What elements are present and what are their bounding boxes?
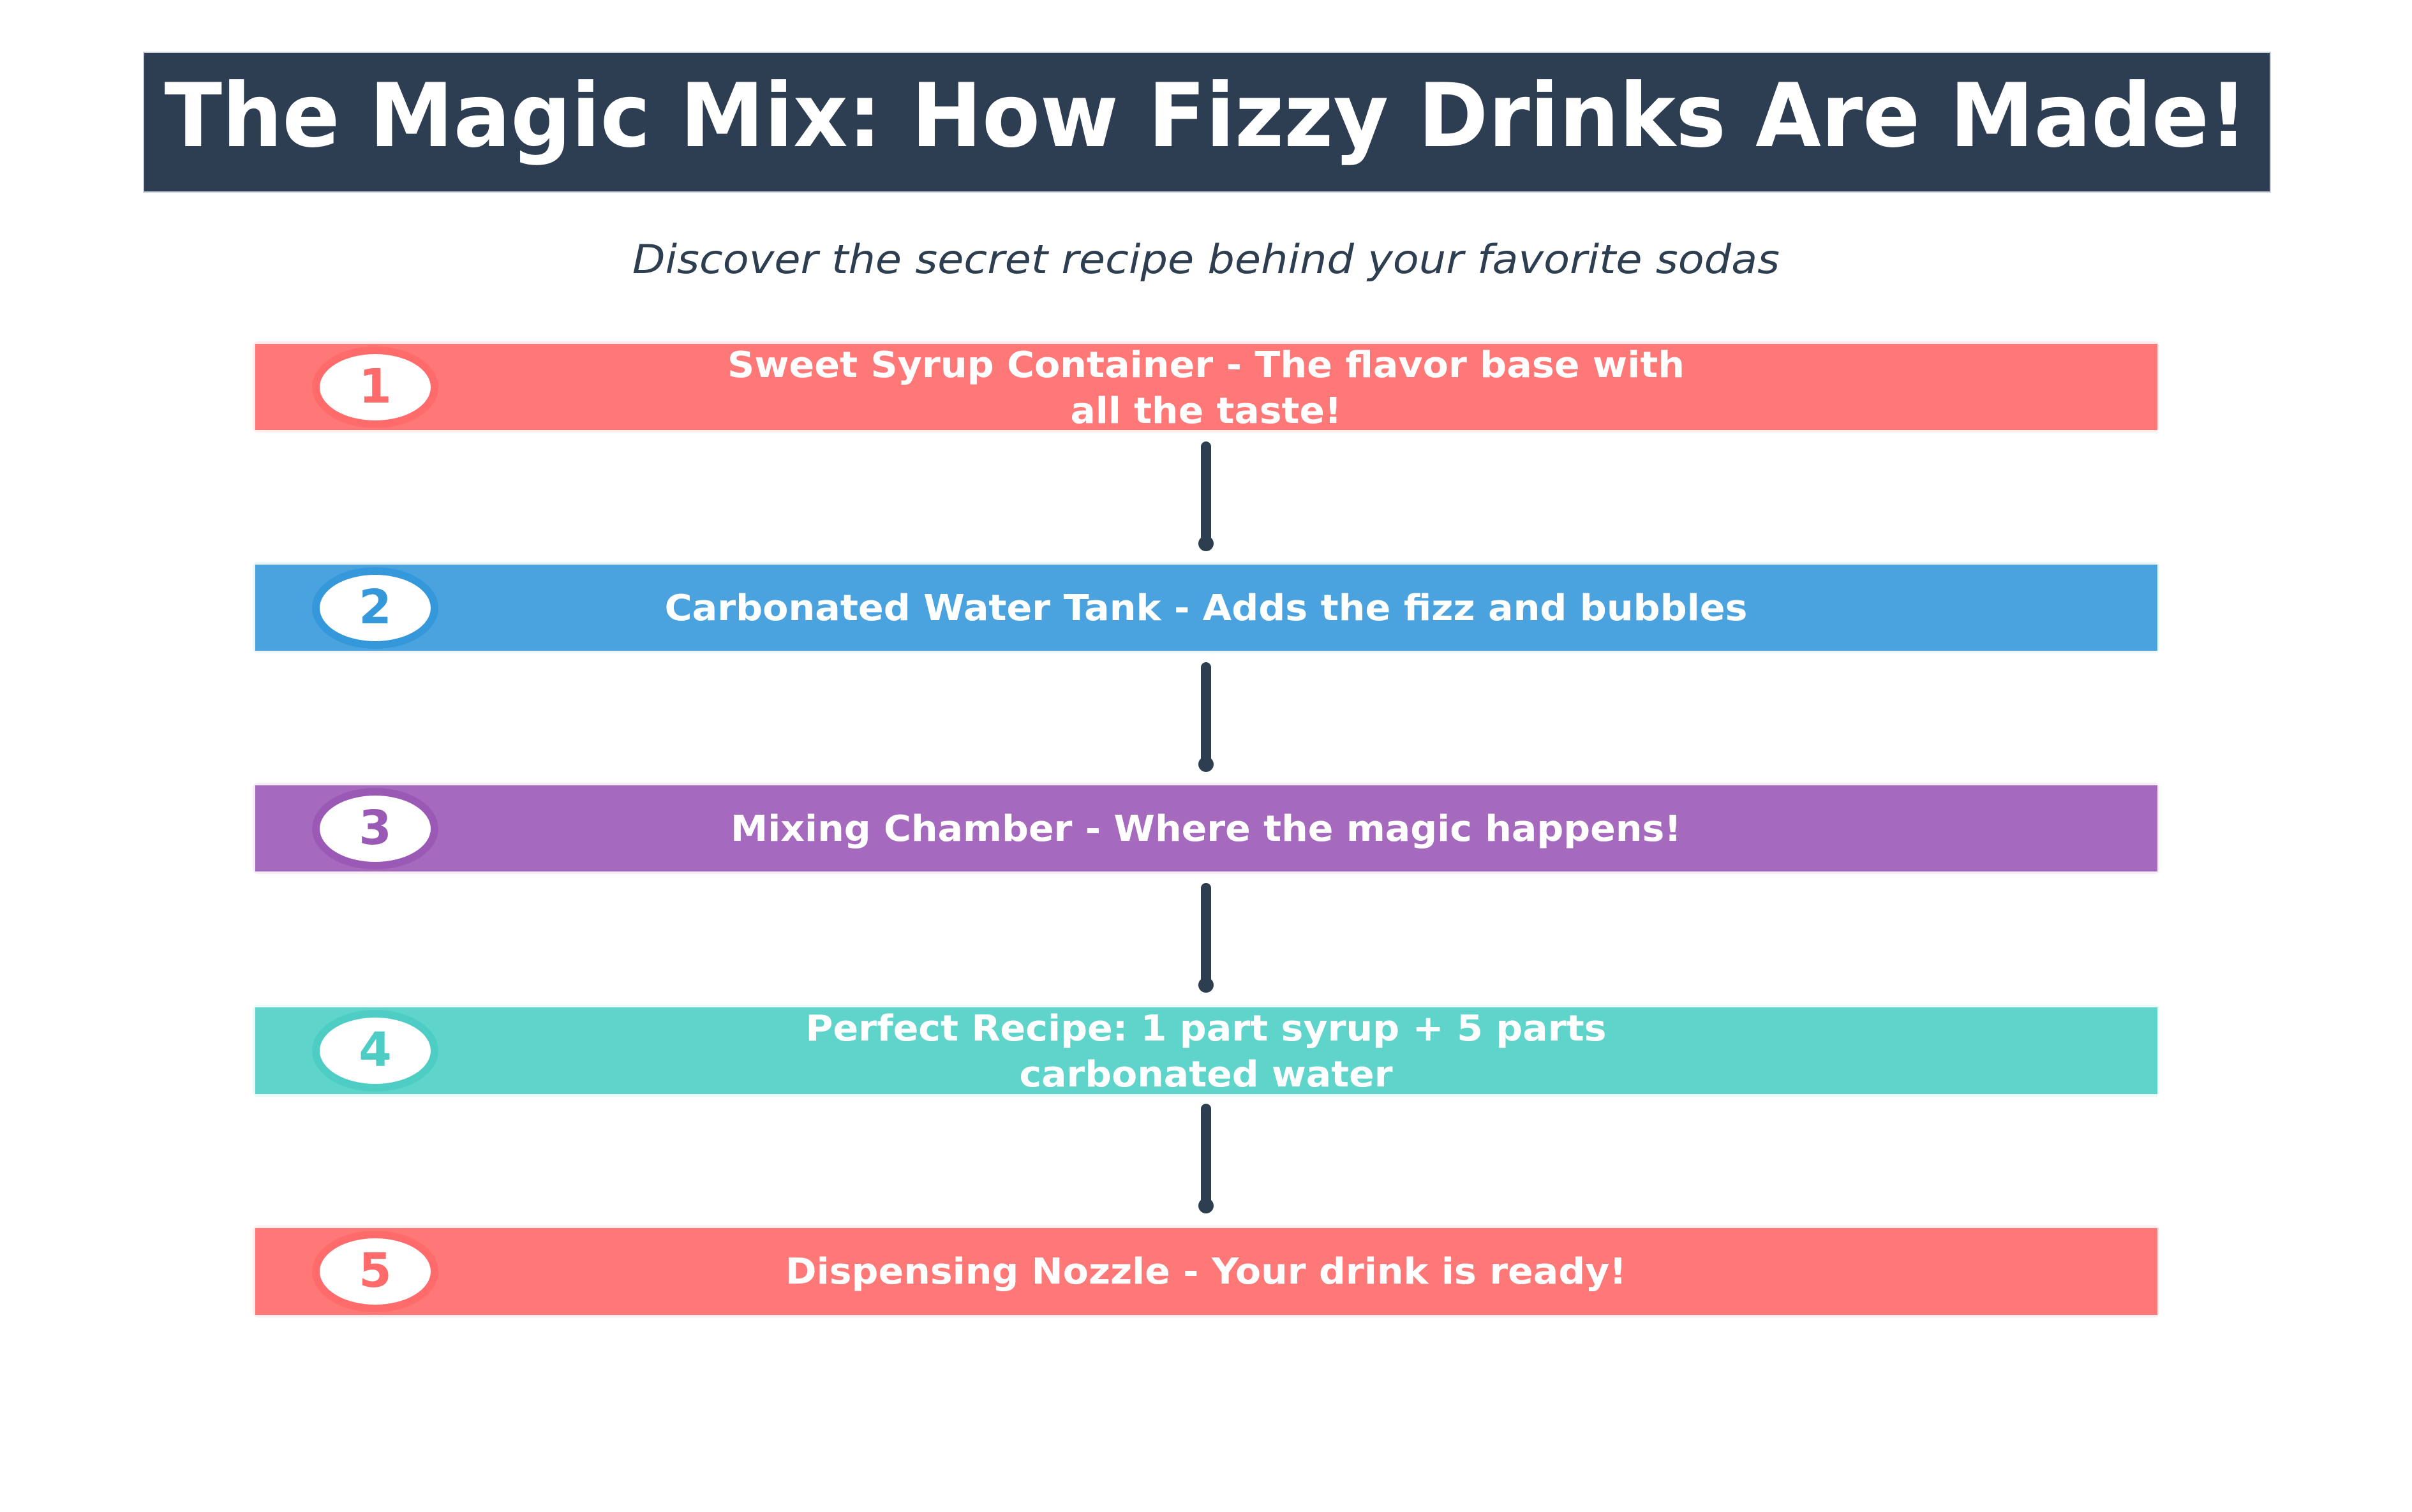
badge 1: 1 xyxy=(359,359,392,414)
title: The Magic Mix: How Fizzy Drinks Are Made! xyxy=(165,64,2247,167)
arrow 3 xyxy=(1198,883,1214,993)
badge 3 xyxy=(312,788,438,870)
arrow 4 xyxy=(1198,1104,1214,1213)
arrow 1 xyxy=(1198,441,1214,551)
text 2: Carbonated Water Tank - Adds the fizz and bubbles xyxy=(665,588,1747,629)
arrow 2 xyxy=(1198,662,1214,772)
step 2: carbonated water xyxy=(253,562,2159,653)
text 3: Mixing Chamber - Where the magic happens! xyxy=(731,808,1681,850)
badge 5: 5 xyxy=(359,1243,392,1298)
text 4: carbonated water xyxy=(1020,1054,1393,1095)
text 5: Dispensing Nozzle - Your drink is ready! xyxy=(785,1251,1627,1293)
badge 4: 4 xyxy=(359,1023,392,1078)
badge 4 xyxy=(312,1010,438,1092)
text 4: Perfect Recipe: 1 part syrup + 5 parts xyxy=(805,1008,1607,1049)
step 3: mixing chamber xyxy=(253,783,2159,874)
badge 1 xyxy=(312,346,438,428)
badge 2: 2 xyxy=(359,580,392,635)
step 1: sweet syrup xyxy=(253,341,2159,433)
text 1: Sweet Syrup Container - The flavor base with xyxy=(727,345,1685,386)
step 4: recipe xyxy=(253,1005,2159,1097)
badge 3: 3 xyxy=(359,801,392,856)
badge 2 xyxy=(312,567,438,649)
badge 5 xyxy=(312,1231,438,1312)
step 5: dispensing nozzle xyxy=(253,1226,2159,1317)
subtitle: Discover the secret recipe behind your favorite sodas xyxy=(632,236,1780,283)
text 1: all the taste! xyxy=(1071,390,1341,432)
